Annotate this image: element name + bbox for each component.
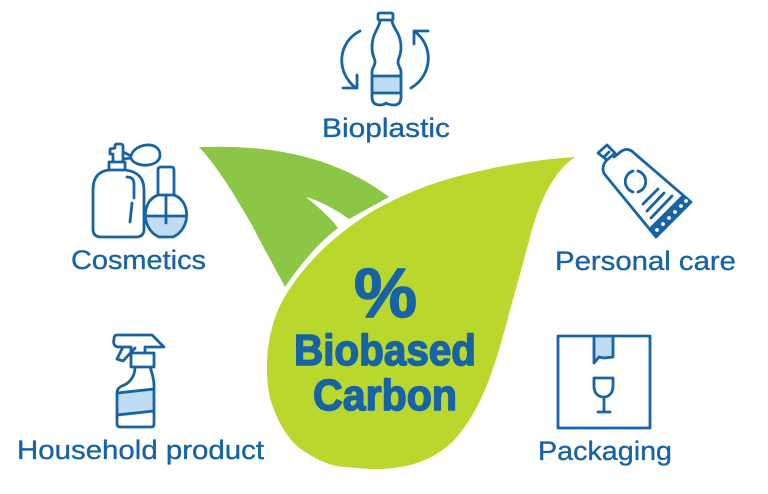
label: Bioplastic: Bioplastic	[322, 113, 450, 143]
center text: percent biobased carbon: %	[354, 254, 417, 332]
label: Household product: Household product	[17, 435, 265, 465]
label: Personal care: Personal care	[555, 246, 736, 276]
label: Cosmetics: Cosmetics	[71, 245, 206, 275]
center text: percent biobased carbon	[294, 254, 476, 420]
large lime green leaf	[267, 157, 575, 469]
center text: percent biobased carbon: Carbon	[313, 371, 457, 420]
label: Packaging: Packaging	[538, 436, 672, 466]
center text: percent biobased carbon: Biobased	[294, 326, 476, 375]
small dark green leaf	[199, 147, 389, 287]
icon: bottle with recycle arrows	[342, 13, 428, 105]
icon: spray bottle	[114, 335, 164, 427]
icon: cream tube	[598, 145, 691, 237]
icon: box with wine glass	[558, 336, 650, 428]
icon: perfume bottles	[93, 144, 187, 237]
